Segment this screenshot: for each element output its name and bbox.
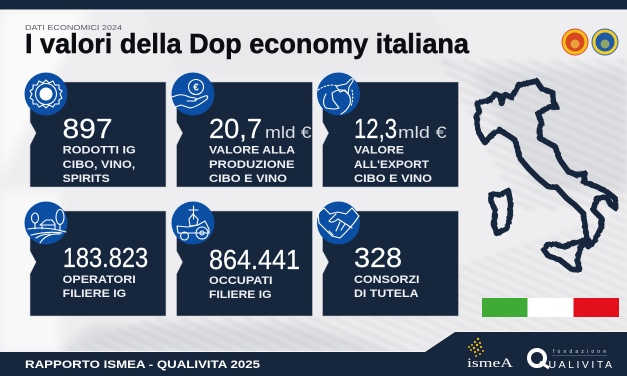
label: RODOTTI IG bbox=[63, 144, 136, 156]
label bbox=[209, 144, 295, 185]
footer text: RAPPORTO ISMEA - QUALIVITA 2025 bbox=[25, 359, 260, 371]
panel: prodotti IG bbox=[24, 72, 166, 187]
icon: globe and plane bbox=[317, 72, 360, 116]
label: VALORE ALLA bbox=[209, 144, 295, 156]
panel: valore export bbox=[317, 72, 458, 187]
icon: farm bbox=[24, 202, 68, 244]
value: 897 bbox=[62, 113, 112, 144]
top bar bbox=[0, 0, 627, 10]
label bbox=[63, 144, 136, 185]
label: PRODUZIONE bbox=[209, 159, 294, 171]
label: OPERATORI bbox=[63, 274, 136, 286]
label: OCCUPATI bbox=[209, 275, 272, 287]
title: I valori della Dop economy italiana bbox=[25, 28, 469, 59]
value: 20,7 bbox=[209, 113, 262, 144]
Italian flag bbox=[482, 298, 619, 317]
icon: tractor bbox=[172, 202, 214, 244]
panel: occupati bbox=[172, 202, 312, 316]
label bbox=[209, 275, 272, 301]
footer band bbox=[0, 331, 627, 376]
label: VALORE bbox=[354, 144, 404, 156]
label bbox=[354, 144, 433, 185]
value: 183.823 bbox=[63, 242, 148, 273]
label: DI TUTELA bbox=[354, 288, 419, 300]
panel: valore produzione bbox=[172, 72, 312, 187]
label: SPIRITS bbox=[63, 173, 110, 185]
label: CIBO E VINO bbox=[209, 173, 288, 185]
icon: handshake bbox=[317, 202, 360, 244]
icon: hand with euro bbox=[172, 72, 214, 116]
value: 12,3 bbox=[354, 113, 397, 144]
mainland outline bbox=[476, 81, 616, 247]
label: CIBO, VINO, bbox=[63, 159, 135, 171]
label bbox=[354, 274, 420, 300]
logo: Ismea: ismeA bbox=[467, 355, 514, 370]
panel: consorzi bbox=[317, 202, 458, 316]
label: FILIERE IG bbox=[63, 288, 126, 300]
Sardinia bbox=[491, 191, 511, 233]
unit: mld € bbox=[265, 124, 312, 142]
value: 864.441 bbox=[209, 244, 300, 275]
logo: Ismea bbox=[467, 338, 514, 370]
label: ALL'EXPORT bbox=[354, 159, 429, 171]
label: FILIERE IG bbox=[209, 289, 272, 301]
panel: operatori bbox=[24, 202, 166, 316]
logo: Fondazione Qualivita: fondazione bbox=[553, 349, 606, 355]
value: 328 bbox=[354, 242, 402, 273]
icon: seal bbox=[24, 72, 68, 116]
map of Italy bbox=[476, 81, 616, 270]
label: CIBO E VINO bbox=[354, 173, 433, 185]
Sicily bbox=[544, 240, 588, 270]
unit: mld € bbox=[398, 124, 446, 142]
label bbox=[63, 274, 136, 300]
logo: Fondazione Qualivita bbox=[529, 349, 612, 371]
label: CONSORZI bbox=[354, 274, 420, 286]
icon: DOP and IGP seals bbox=[562, 29, 618, 55]
logo: Fondazione Qualivita: UALIVITA bbox=[548, 359, 612, 371]
kicker: DATI ECONOMICI 2024 bbox=[25, 23, 122, 32]
icon: hand with euro: € bbox=[193, 82, 199, 94]
